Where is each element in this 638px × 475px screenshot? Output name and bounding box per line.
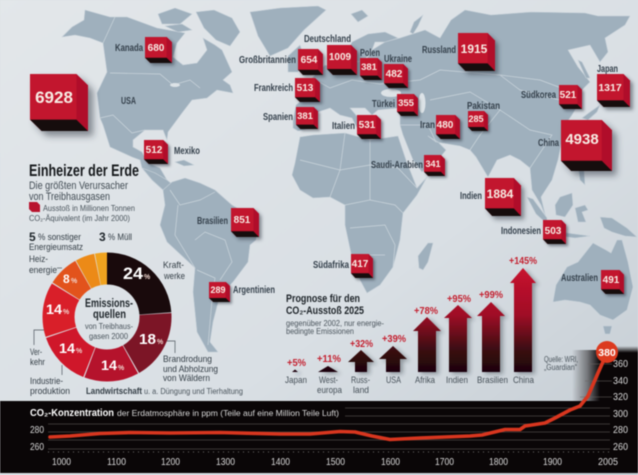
CO2 axis labels: 320 (613, 392, 628, 403)
CO2 axis labels: 2005 (598, 457, 618, 468)
country cube: Pakistan: 285 (468, 114, 484, 124)
donut segment values: % (157, 339, 164, 346)
CO2 axis labels: 1300 (216, 457, 235, 468)
CO2 heading: CO₂-Konzentration (30, 408, 114, 419)
forecast country labels: land (353, 385, 369, 396)
forecast percent values: +145% (509, 255, 538, 267)
country cube: Polen: Polen (360, 48, 380, 59)
country cube: Indonesien: Indonesien (501, 226, 541, 237)
country cube: Pakistan (467, 101, 500, 131)
country cube: Mexiko (144, 140, 200, 164)
CO2 concentration line (50, 355, 606, 440)
forecast percent values: +11% (317, 353, 342, 365)
country cube: Südkorea: Südkorea (521, 90, 556, 101)
source note: Quelle: WRI, (544, 355, 578, 364)
country cube: Großbritannien: 654 (301, 55, 318, 66)
forecast percent values: +78% (414, 305, 439, 317)
country cube: Saudi-Arabien: Saudi-Arabien (371, 160, 423, 171)
country cube: Polen (360, 48, 382, 80)
forecast heading: Prognose für den (286, 293, 360, 305)
forecast percent values (287, 255, 538, 369)
country cube: Australien: Australien (561, 273, 598, 284)
source note: „Guardian“ (544, 363, 577, 372)
CO2 heading (30, 408, 339, 419)
donut segment labels: kehr (30, 357, 45, 368)
donut segment labels: % Müll (108, 232, 132, 243)
forecast percent values: +5% (287, 357, 307, 369)
CO2 axis labels: 340 (613, 376, 628, 387)
CO2 band (0, 346, 638, 473)
CO2 axis labels: 1700 (435, 457, 454, 468)
CO2 axis labels: 1600 (381, 457, 400, 468)
donut leader lines (34, 268, 175, 375)
country cube: Russland: Russland (422, 45, 456, 56)
forecast heading (286, 293, 384, 336)
donut segment labels: energie (29, 265, 57, 276)
country cube: USA: 6928 (35, 88, 73, 107)
country cube: Saudi-Arabien: 341 (425, 159, 441, 169)
forecast country labels: China (513, 375, 535, 386)
donut segment values: 14 (101, 357, 117, 373)
country cube: Indien (460, 178, 521, 216)
country cube: Argentinien: 289 (210, 285, 226, 295)
country cube: Deutschland: Deutschland (304, 34, 351, 45)
donut segment values: % (63, 309, 70, 316)
country cube: Russland: 1915 (461, 42, 488, 56)
country cube: Argentinien (209, 282, 275, 302)
source note (544, 355, 578, 372)
donut centre label (85, 298, 133, 341)
CO2 axis labels: 1000 (52, 457, 71, 468)
donut centre label: quellen (93, 309, 126, 321)
country cube: USA: USA (121, 96, 136, 107)
forecast percent values: +95% (447, 293, 472, 305)
forecast country labels: Afrika (415, 375, 436, 386)
CO2 axis labels: 280 (613, 425, 628, 436)
CO2 axis labels: 1800 (489, 457, 508, 468)
forecast country labels: West- (319, 375, 338, 386)
CO2 axis labels: 300 (613, 409, 628, 420)
donut segment values: 18 (139, 331, 156, 348)
country cube: Japan: 1317 (598, 82, 622, 94)
CO2 axis labels: 1900 (543, 457, 562, 468)
country cube: Pakistan: Pakistan (467, 101, 500, 112)
forecast heading: bedingte Emissionen (286, 327, 354, 336)
CO2 axis labels: 1400 (271, 457, 290, 468)
donut segment labels: Heiz- (29, 254, 48, 265)
country cube: USA (30, 74, 136, 131)
country cube: Iran (420, 115, 460, 139)
country cube: Südafrika (313, 254, 373, 278)
donut segment labels: produktion (30, 386, 70, 397)
donut segment labels (29, 230, 243, 397)
country cube: Ukraine (384, 54, 412, 88)
country cube: Kanada (115, 37, 172, 63)
CO2 axis labels: 1200 (161, 457, 180, 468)
donut segment values: % (76, 348, 83, 355)
country cube: Türkei (372, 94, 418, 116)
country cube: Australien: 491 (603, 275, 620, 286)
subtitle: von Treibhausgasen (29, 191, 110, 203)
legend: Ausstoß in Millionen Tonnen (43, 204, 135, 213)
forecast country labels: Japan (285, 375, 307, 386)
country cube: Frankreich: Frankreich (254, 83, 293, 94)
legend (29, 202, 135, 223)
world map (62, 6, 637, 352)
country cube: Kanada: Kanada (115, 43, 143, 54)
CO2 axis labels: 1100 (107, 457, 126, 468)
country cube: Russland (422, 33, 495, 71)
country cube: Brasilien (197, 208, 259, 237)
donut centre label: gasen 2000 (89, 332, 129, 341)
donut segment labels: u. a. Düngung und Tierhaltung (144, 387, 243, 396)
country cube: Frankreich: 513 (297, 83, 314, 94)
country cube: Argentinien: Argentinien (233, 285, 275, 296)
CO2 axis labels: 360 (613, 359, 628, 370)
country cube: Polen: 381 (361, 62, 378, 73)
country cube: Ukraine: Ukraine (384, 54, 412, 65)
country cube: Iran: 480 (437, 120, 454, 131)
donut segment labels: von Wäldern (163, 373, 210, 384)
donut segment labels: und Abholzung (163, 364, 218, 375)
donut segment labels: Energieumsatz (29, 242, 83, 253)
country cube: Südafrika: 417 (352, 259, 369, 270)
donut segment labels: werke (163, 271, 185, 282)
donut chart: Emissionsquellen (58, 268, 156, 366)
forecast heading: CO₂-Ausstoß 2025 (286, 305, 364, 317)
donut segment labels: Ver- (30, 347, 42, 358)
country cube: China: China (538, 138, 559, 149)
donut centre label: Emissions- (85, 298, 133, 310)
donut segment values: % (71, 278, 78, 285)
marker: 380 ppm: 380 (598, 347, 616, 359)
country cube: Mexiko: Mexiko (174, 146, 200, 157)
CO2 grid lines (48, 364, 612, 452)
marker: 380 ppm (596, 341, 618, 363)
donut segment labels: Brandrodung (163, 354, 212, 365)
country cube: Italien: 531 (359, 120, 376, 131)
donut segment labels: 3 (99, 230, 106, 244)
forecast country labels: Brasilien (477, 375, 508, 386)
CO2 axis labels (30, 359, 628, 468)
CO2 axis labels: 280 (30, 425, 44, 436)
forecast country labels: Indien (446, 375, 468, 386)
country cube: Iran: Iran (420, 120, 435, 131)
arrow chart: forecast 2025 (292, 268, 536, 372)
donut segment values (46, 264, 164, 373)
country cube: Spanien: 381 (297, 111, 314, 122)
country cube: Ukraine: 482 (386, 69, 403, 80)
donut segment values: 14 (59, 340, 75, 356)
title: Einheizer der Erde (29, 161, 139, 180)
country cube: Großbritannien (239, 49, 323, 75)
subtitle (29, 180, 128, 203)
country cube: Spanien (263, 107, 318, 129)
forecast percent values: +99% (479, 289, 504, 301)
country cube: Indonesien: 503 (545, 226, 562, 237)
donut segment labels: Kraft- (163, 260, 184, 271)
country cube: Australien (561, 270, 624, 294)
donut segment values: % (144, 274, 151, 281)
country cube: Italien (332, 115, 381, 139)
donut segment values: % (118, 365, 125, 372)
country cube: Saudi-Arabien (371, 155, 445, 176)
country cube: China (538, 120, 612, 171)
donut segment labels: % sonstiger (38, 232, 81, 243)
forecast country labels: USA (386, 375, 401, 386)
country cube: Brasilien: Brasilien (197, 216, 228, 227)
forecast country labels (285, 375, 535, 396)
country cube: Südkorea (521, 85, 582, 109)
donut segment labels: Industrie- (30, 376, 63, 387)
country cube: Kanada: 680 (148, 43, 165, 54)
forecast country labels: Russ- (351, 375, 370, 386)
country cube: Italien: Italien (332, 121, 355, 132)
forecast percent values: +32% (350, 338, 374, 350)
country cube: Japan: Japan (597, 64, 618, 75)
CO2 axis labels: 260 (30, 442, 44, 453)
country cube: Großbritannien: Großbritannien (239, 55, 296, 66)
donut segment values: 24 (123, 264, 144, 283)
forecast heading: gegenüber 2002, nur energie- (286, 319, 384, 328)
country cube: Türkei: Türkei (372, 99, 395, 110)
country cube: Deutschland (304, 34, 357, 75)
donut centre label: von Treibhaus- (85, 322, 133, 331)
country cube: Spanien: Spanien (263, 112, 293, 123)
country cube: China: 4938 (565, 131, 599, 148)
country cube: Brasilien: 851 (234, 215, 251, 226)
country cube: Deutschland: 1009 (329, 52, 352, 63)
donut segment values: 8 (63, 272, 70, 286)
subtitle: Die größten Verursacher (29, 180, 128, 192)
country cube: Mexiko: 512 (146, 145, 163, 156)
country cube: Indonesien (501, 220, 566, 244)
donut segment labels: 5 (29, 230, 36, 244)
country cube: Japan (597, 64, 630, 107)
forecast country labels: europa (317, 385, 343, 396)
forecast percent values: +39% (382, 333, 407, 345)
CO2 axis labels: 1500 (326, 457, 345, 468)
CO2 axis labels: 260 (613, 442, 628, 453)
country cube: Indien: 1884 (487, 187, 514, 201)
CO2 heading: der Erdatmosphäre in ppm (Teile auf eine Million Teile Luft) (117, 408, 339, 418)
donut segment labels: Landwirtschaft (86, 386, 143, 397)
country cube: Frankreich (254, 78, 320, 102)
country cube: Südafrika: Südafrika (313, 260, 349, 271)
country cube: Türkei: 355 (398, 98, 415, 109)
donut segment values: 14 (46, 301, 62, 317)
legend: CO₂-Äquivalent (im Jahr 2000) (29, 214, 130, 223)
country cube: Südkorea: 521 (560, 90, 577, 101)
country cube: Indien: Indien (460, 191, 482, 202)
map borders and inland water (100, 17, 572, 345)
